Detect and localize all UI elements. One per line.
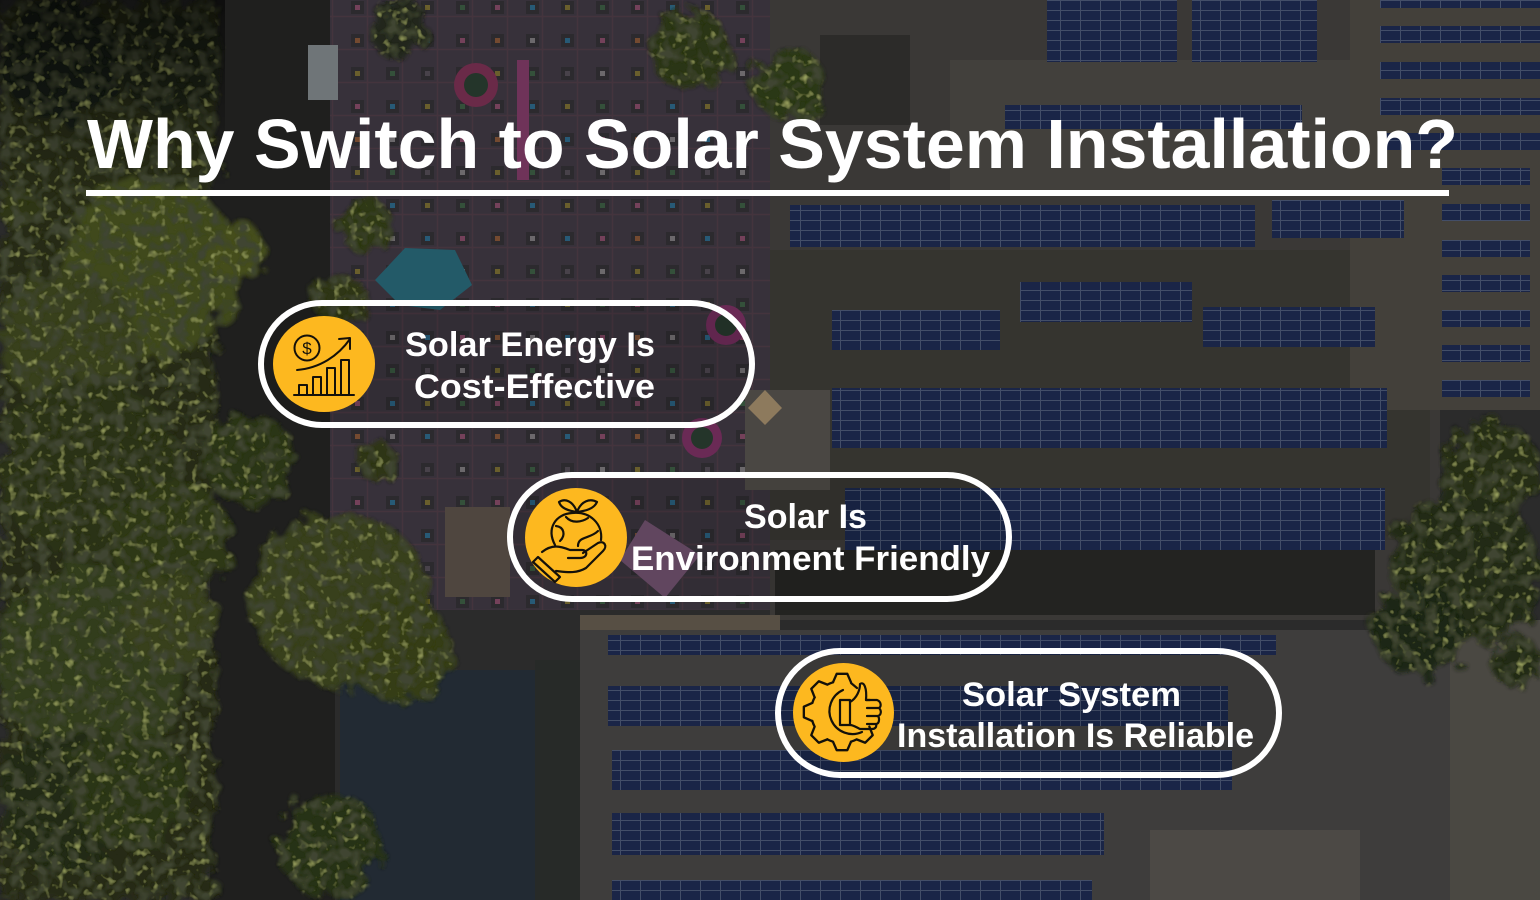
pill outline (261, 303, 752, 425)
title underline (86, 190, 1449, 196)
label: environment friendly (631, 498, 990, 578)
panel: cost-effective (261, 303, 752, 425)
label: reliable (897, 676, 1254, 755)
panel: environment friendly (510, 475, 1009, 599)
label: reliable: Solar System (962, 676, 1181, 714)
panel: reliable (778, 651, 1279, 775)
title: Why Switch to Solar System Installation? (87, 105, 1458, 183)
pill outline (510, 475, 1009, 599)
icon: money growth chart (273, 316, 375, 412)
label: reliable: Installation Is Reliable (897, 717, 1254, 755)
label: cost-effective: Cost-Effective (414, 368, 655, 406)
label: environment friendly: Solar Is (744, 498, 867, 536)
label: cost-effective (405, 326, 655, 406)
pill outline (778, 651, 1279, 775)
label: environment friendly: Environment Friendly (631, 540, 990, 578)
label: cost-effective: Solar Energy Is (405, 326, 655, 364)
icon: hand holding planet (525, 488, 627, 587)
icon: gear with thumbs up (793, 663, 894, 762)
icon: money growth chart: $ (302, 339, 312, 358)
